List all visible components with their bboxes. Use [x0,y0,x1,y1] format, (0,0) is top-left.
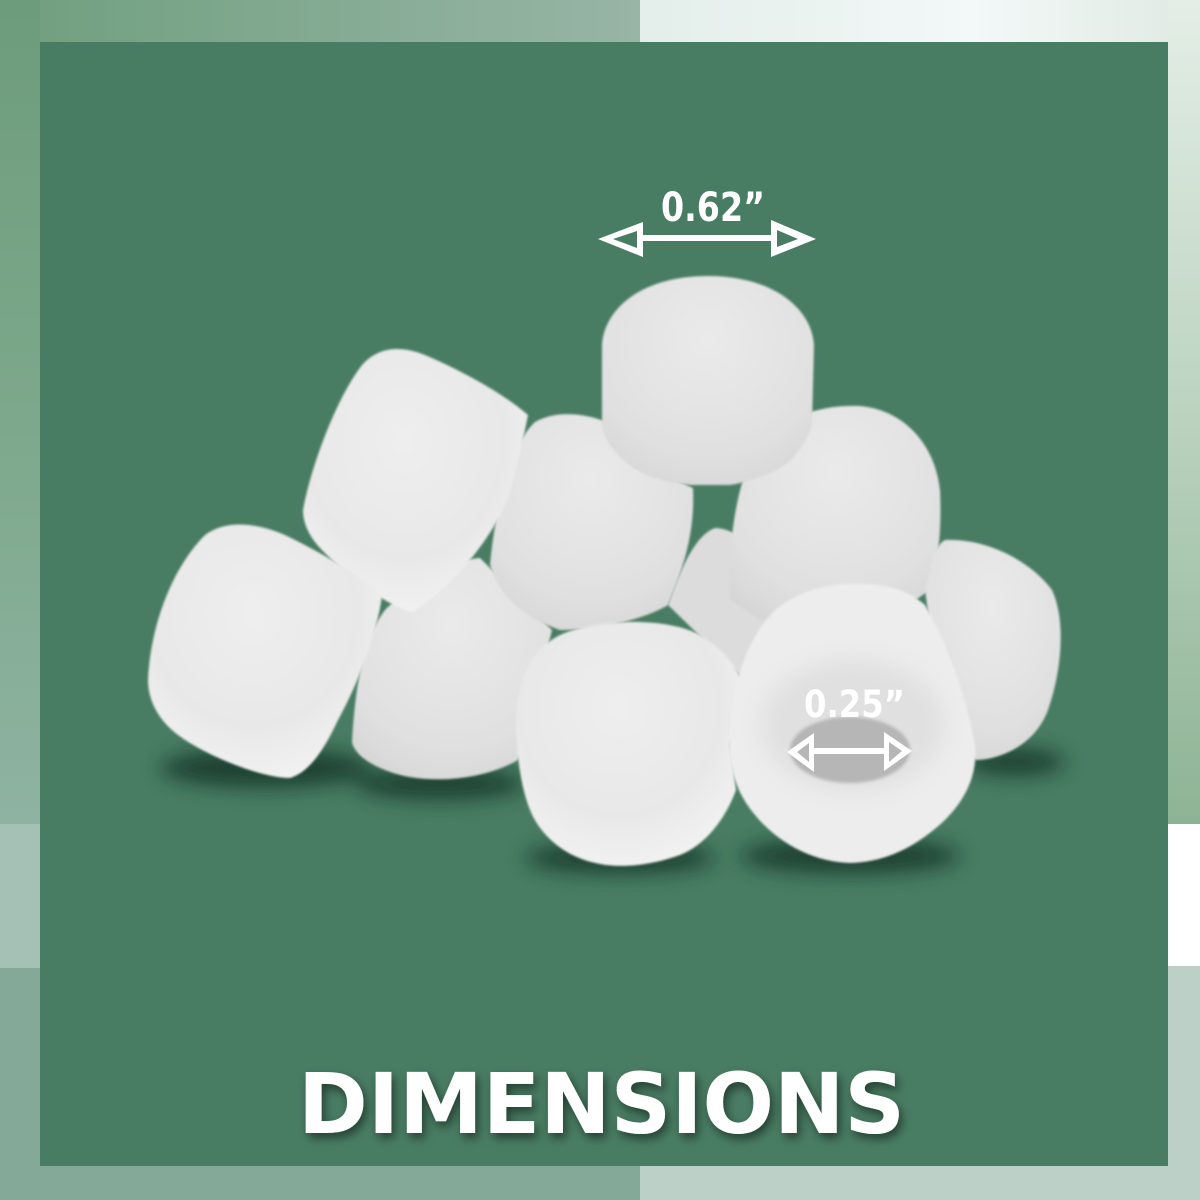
end face shading [761,659,945,791]
cap shadows [160,748,1065,874]
cap: rear centre [668,528,790,680]
cap: top, measured 0.62 in [602,276,814,485]
double arrow: hole width [787,732,912,772]
cap: lower left, behind [352,558,552,779]
cap: tilted far left [148,524,382,778]
label 0.62: 0.62” [661,185,765,231]
dimension: 0.62 in width [598,185,816,257]
cap: far right [925,540,1061,760]
label 0.25: 0.25” [804,683,905,726]
cap: rear right [730,406,941,625]
centre hole [790,717,910,783]
dimension: 0.25 in hole [787,683,912,772]
product photo: pile of white silicone caps [148,276,1065,874]
title: DIMENSIONS [298,1055,905,1153]
double arrow: outer width [598,220,816,257]
cap: centre [490,414,693,630]
cap: front centre [516,622,745,866]
cap: front right, with hole [729,584,975,863]
cap: tilted upper left [303,349,528,612]
